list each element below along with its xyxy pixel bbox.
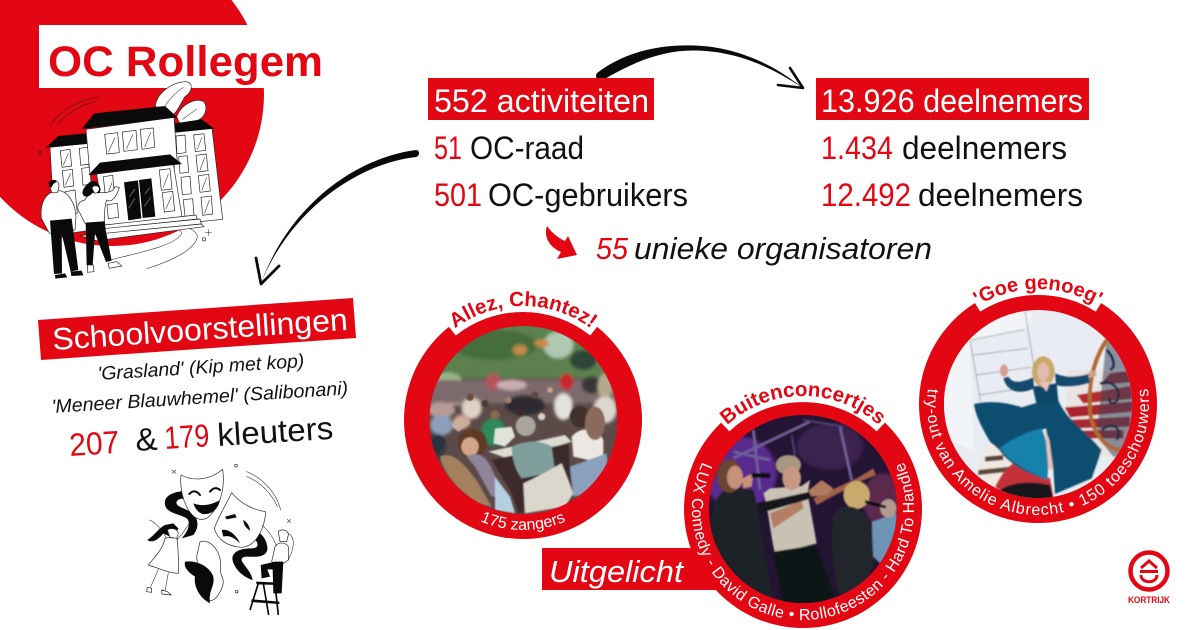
stat line: 1.434 deelnemers xyxy=(821,130,1067,166)
photo circle: Allez, Chantez! xyxy=(404,291,642,539)
logo: Kortrijk: KORTRIJK xyxy=(1128,595,1170,606)
right wing xyxy=(173,119,223,224)
circle caption: LUX Comedy - David Galle • Rollofeesten - Hard To Handle xyxy=(692,463,914,620)
circle title: Allez, Chantez! xyxy=(452,291,598,328)
leaf xyxy=(185,541,223,603)
stat: 207 and 179 kleuters: & xyxy=(134,421,158,458)
stat line: 1.434 deelnemers: deelnemers xyxy=(902,130,1067,166)
illustration: theatre masks with performers xyxy=(147,464,293,615)
central block xyxy=(82,106,182,227)
stat: 207 and 179 kleuters: 179 xyxy=(163,417,210,456)
stat box: 552 activiteiten: 552 activiteiten xyxy=(434,83,649,119)
white band behind title xyxy=(450,303,596,329)
photo: crowd at tables xyxy=(423,323,622,520)
arrow: activiteiten to deelnemers xyxy=(596,45,803,88)
white band behind title xyxy=(976,287,1100,305)
performer left xyxy=(147,520,190,595)
left wing xyxy=(46,133,93,235)
stat: 207 and 179 kleuters xyxy=(68,410,334,463)
stat line: 12.492 deelnemers: 12.492 xyxy=(821,177,911,213)
stat line: 501 OC-gebruikers: OC-gebruikers xyxy=(488,177,688,213)
stat line: 12.492 deelnemers: deelnemers xyxy=(918,177,1083,213)
stat line: 55 unieke organisatoren: unieke organisatoren xyxy=(634,231,932,266)
man xyxy=(41,180,83,279)
entrance steps xyxy=(80,215,204,241)
red arrow to organisatoren xyxy=(546,226,577,259)
ribbons xyxy=(165,491,267,580)
circle caption: try-out van Amelie Albrecht • 150 toeschouwers xyxy=(924,389,1150,516)
stat box: 13.926 deelnemers: 13.926 deelnemers xyxy=(821,83,1083,119)
photo circle: Goe genoeg xyxy=(919,278,1157,523)
circle title: Buitenconcertjes xyxy=(719,385,884,424)
decorative marks xyxy=(172,464,291,593)
circle caption: 175 zangers xyxy=(481,512,565,532)
performer right on stool xyxy=(250,526,293,615)
stat line: 501 OC-gebruikers: 501 xyxy=(434,177,482,213)
label box: Uitgelicht: Uitgelicht xyxy=(549,554,684,589)
logo: Kortrijk xyxy=(1128,552,1170,606)
heading: Schoolvoorstellingen: Schoolvoorstellingen xyxy=(51,302,349,357)
arrow: activiteiten to schoolvoorstellingen xyxy=(256,150,419,284)
photo: singers on stage xyxy=(709,415,897,603)
label box: Uitgelicht xyxy=(542,548,722,590)
red background circle xyxy=(0,0,264,246)
white band behind title xyxy=(723,393,883,425)
stat line: 51 OC-raad: 51 xyxy=(434,130,462,166)
stat: 207 and 179 kleuters: kleuters xyxy=(216,410,334,453)
stat line: 12.492 deelnemers xyxy=(821,177,1083,213)
text: Meneer Blauwhemel: 'Meneer Blauwhemel' (Salibonani) xyxy=(51,378,349,418)
stat line: 51 OC-raad: OC-raad xyxy=(470,130,584,166)
stat: 207 and 179 kleuters: 207 xyxy=(68,424,120,463)
sad mask xyxy=(214,493,266,547)
stat line: 55 unieke organisatoren: 55 xyxy=(596,231,629,266)
motion lines and dots xyxy=(38,97,211,269)
title: OC Rollegem: OC Rollegem xyxy=(48,38,323,86)
text: Grasland: 'Grasland' (Kip met kop) xyxy=(97,351,305,385)
photo: woman in blue gown on staircase xyxy=(940,307,1137,503)
stat line: 1.434 deelnemers: 1.434 xyxy=(821,130,893,166)
circle title: 'Goe genoeg' xyxy=(972,278,1104,305)
happy mask xyxy=(181,469,223,519)
woman xyxy=(78,181,122,272)
leaves behind building xyxy=(155,82,206,124)
photo circle: Buitenconcertjes xyxy=(684,385,922,628)
illustration: cultural centre building with two people xyxy=(38,82,223,279)
